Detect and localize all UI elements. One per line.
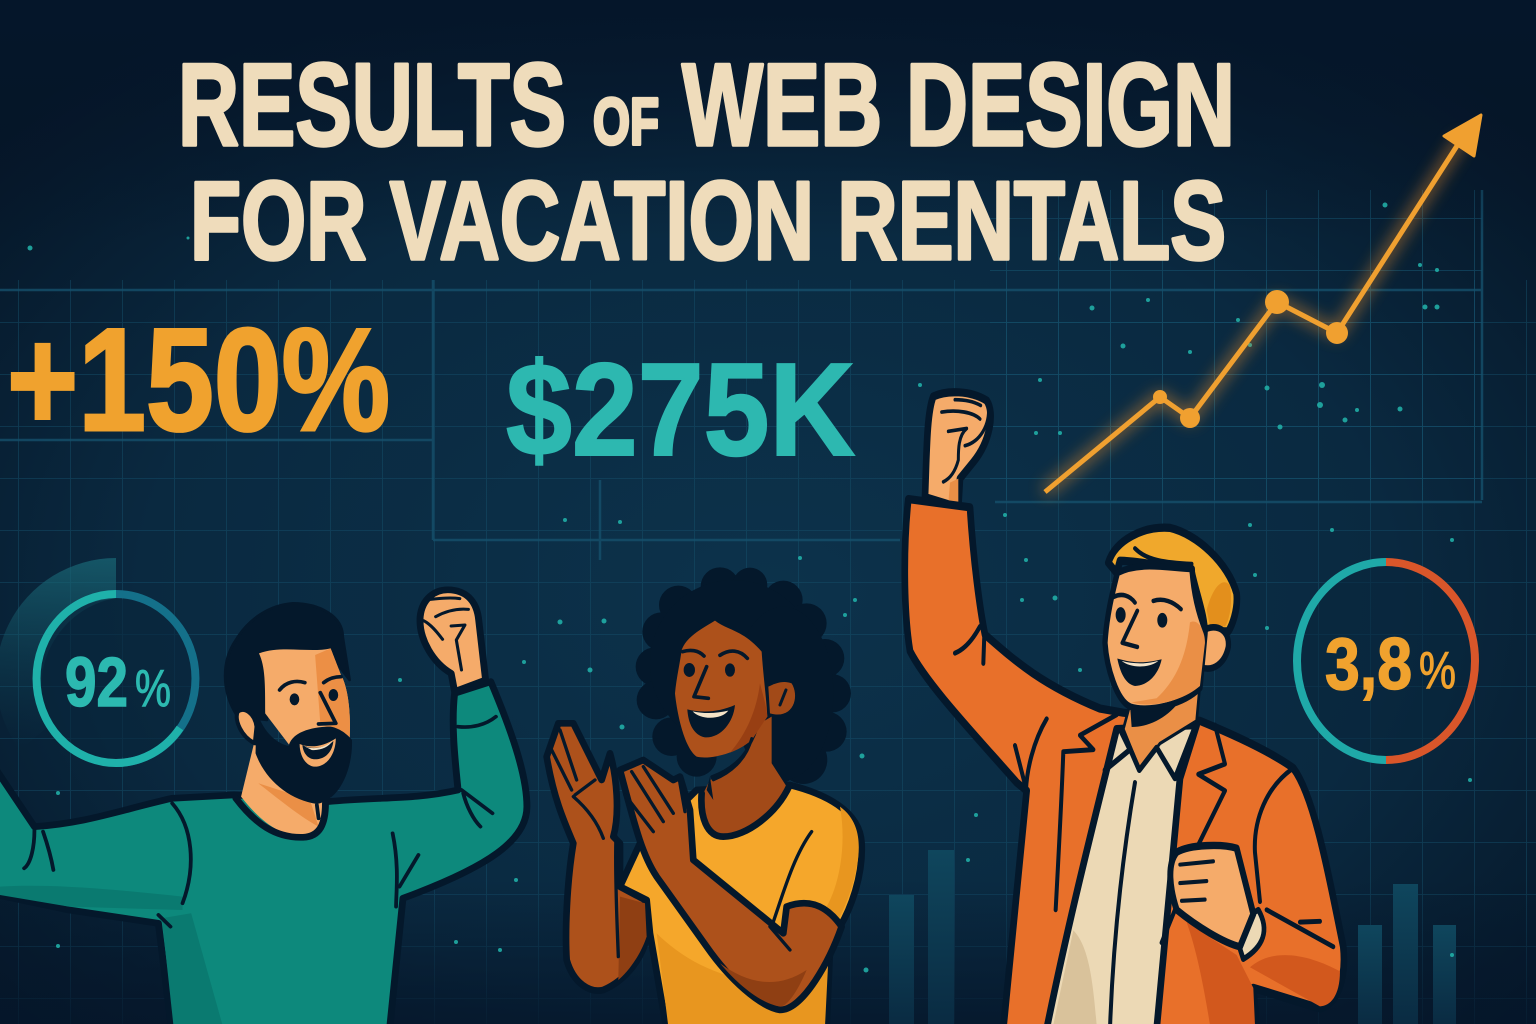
beard [256,710,352,804]
title: FOR VACATION RENTALS [190,159,1226,283]
background bar chart [889,850,1456,1024]
neck [700,717,787,837]
title [178,39,1235,283]
face [1105,566,1205,709]
hair [225,603,350,720]
neck and collar [1123,684,1200,770]
mouth [687,705,735,737]
ring gauge: 92% [0,558,195,763]
ring gauge: 3,8% [1297,562,1475,760]
eyes and brows [290,689,338,705]
eyes, brows, nose [684,663,735,677]
lower fist and cuff [1240,910,1264,959]
mouth [1117,658,1162,686]
title: WEB DESIGN [682,39,1235,170]
white shirt [1047,725,1197,1024]
person: bearded man in teal sweater [0,590,527,1024]
ring gauge: 3,8%: 3,8 [1325,624,1412,705]
title: OF [593,84,659,158]
ring gauge: 92%: % [135,660,171,718]
growth line chart with arrow [1045,115,1481,492]
teal sweater [0,682,527,1024]
eyes, brows, nose [1116,607,1167,628]
yellow shirt [620,785,862,1024]
hair [1108,528,1237,631]
title: RESULTS [178,39,566,170]
raised fist [420,590,486,692]
scattered data points [28,202,1472,972]
face [259,648,350,745]
jaw shadow [712,738,752,780]
face [675,621,767,757]
ear [1202,627,1228,669]
ear [768,682,795,714]
front clapping arm [620,760,842,1010]
raised fist [925,392,991,507]
sweater folds [24,717,496,927]
stat: +150%: +150% [7,298,390,461]
rear clapping arm [547,723,647,991]
stat: $275K: $275K [506,336,855,483]
ring gauge: 3,8%: % [1419,642,1456,700]
lapels and folds [955,626,1333,947]
neck [241,740,326,837]
mouth [300,738,336,767]
person: blond man in orange blazer [905,392,1344,1024]
ring gauge: 92%: 92 [65,643,128,721]
person: woman with curly hair in yellow shirt [547,567,862,1024]
ear [237,710,257,743]
orange blazer and raised arm [905,499,1344,1024]
curly hair [636,567,851,784]
